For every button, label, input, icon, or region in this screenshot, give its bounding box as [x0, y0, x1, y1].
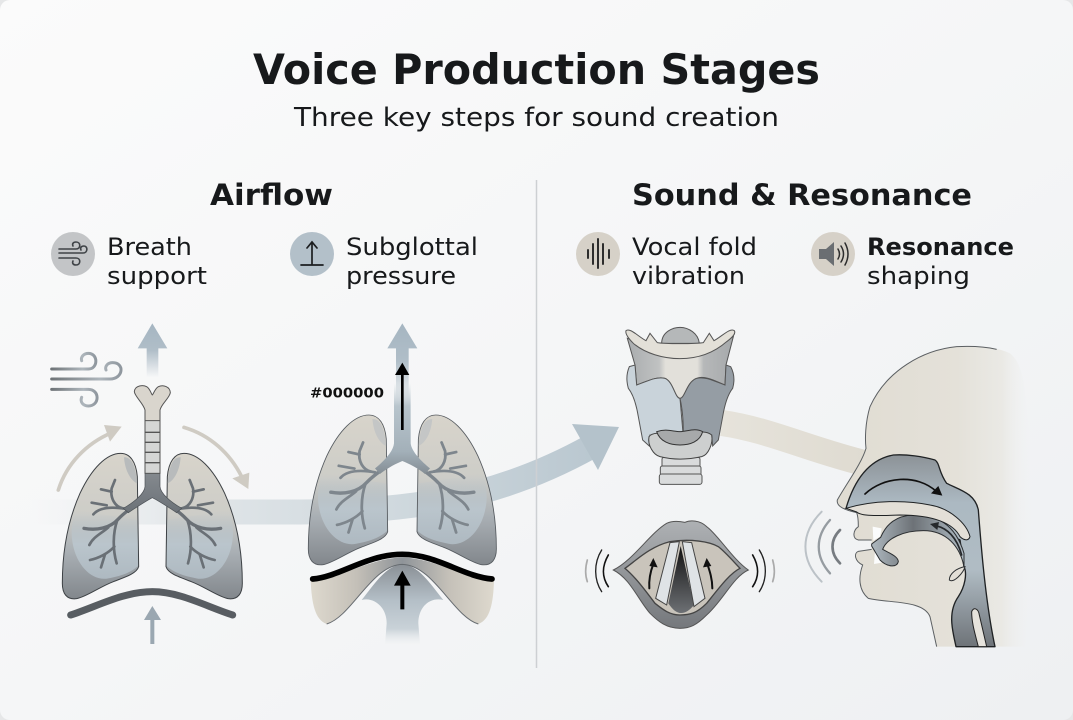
epiglottis	[949, 567, 965, 581]
palate	[846, 502, 970, 540]
item: breath support	[51, 232, 207, 290]
left lung	[308, 415, 393, 565]
label: resonance shaping: Resonance	[867, 233, 1014, 261]
left fold	[656, 542, 679, 605]
inner tissue	[625, 540, 740, 615]
label: resonance shaping	[867, 233, 1014, 290]
icon: speaker	[811, 232, 855, 276]
left lung	[62, 453, 143, 599]
right vibration arcs	[753, 550, 774, 592]
arrow: pressure stream	[387, 323, 417, 400]
flow band: larynx to head	[722, 423, 868, 464]
label: subglottal pressure	[346, 233, 478, 290]
arrow: inhale curve	[58, 425, 122, 490]
arrow: oral airflow	[930, 522, 962, 555]
icon: waveform	[576, 232, 620, 276]
subtitle: Three key steps for sound creation	[293, 103, 779, 133]
arrow: nasal airflow	[865, 479, 942, 496]
label: subglottal pressure: pressure	[346, 262, 456, 290]
title: Voice Production Stages	[253, 45, 820, 94]
trachea rings	[659, 457, 702, 484]
diaphragm	[71, 592, 233, 615]
illustration: breathing lungs	[52, 323, 249, 644]
label: resonance shaping: shaping	[867, 262, 970, 290]
arrow: diaphragm lift	[144, 606, 161, 644]
left vibration arcs	[586, 550, 608, 592]
abdominal tissue	[311, 557, 494, 645]
right fold	[682, 542, 705, 607]
cricoid ring	[649, 432, 712, 459]
label: breath support: support	[107, 262, 207, 290]
label: vocal fold vibration: vibration	[632, 262, 745, 290]
glottis	[668, 546, 694, 613]
label: subglottal pressure: Subglottal	[346, 233, 478, 261]
arrow: black upward push	[394, 571, 411, 609]
hyoid bone	[626, 330, 735, 359]
label: breath support: Breath	[107, 233, 192, 261]
teeth	[873, 527, 882, 564]
item: resonance shaping	[811, 232, 1014, 290]
trachea and bronchi	[123, 386, 182, 513]
icon: wind gusts	[52, 353, 121, 406]
hyoid dome	[662, 327, 699, 343]
illustration: larynx	[626, 327, 735, 484]
illustration: subglottal pressure lungs	[308, 323, 496, 645]
annotation: hex colour label: #000000	[310, 386, 384, 401]
oral cavity	[872, 515, 964, 567]
flow band: airflow to larynx	[30, 424, 619, 512]
trachea and bronchi	[375, 383, 430, 474]
item: subglottal pressure	[290, 232, 478, 290]
airway	[846, 455, 995, 647]
divider	[536, 180, 538, 668]
right cartilage plate	[680, 365, 734, 446]
arrow: black pressure arrow	[395, 363, 409, 430]
item: vocal fold vibration	[576, 232, 757, 290]
icon: upward arrow over bar	[290, 232, 334, 276]
icon: wind	[51, 232, 95, 276]
right lung	[412, 415, 496, 565]
arrows in folds	[649, 558, 712, 588]
left cartilage plate	[627, 365, 683, 446]
heading: Airflow: Airflow	[210, 178, 333, 212]
thyroid cartilage	[627, 337, 733, 398]
arrow: upward airflow	[138, 323, 167, 377]
outer tissue	[613, 521, 748, 628]
right lung	[161, 453, 242, 599]
sound waves	[805, 512, 840, 582]
arrow: exhale curve	[184, 427, 249, 489]
oesophagus slit	[972, 609, 987, 647]
diaphragm: thick black line	[313, 554, 492, 579]
illustration: vocal folds	[586, 521, 774, 628]
head outline	[837, 346, 997, 647]
label: vocal fold vibration: Vocal fold	[632, 233, 757, 261]
label: breath support	[107, 233, 207, 290]
cricoid opening	[657, 430, 703, 445]
head silhouette	[837, 346, 1031, 647]
heading: Sound &amp; Resonance: Sound & Resonance	[632, 178, 972, 212]
label: vocal fold vibration	[632, 233, 757, 290]
illustration: head profile and vocal tract	[805, 346, 1031, 647]
